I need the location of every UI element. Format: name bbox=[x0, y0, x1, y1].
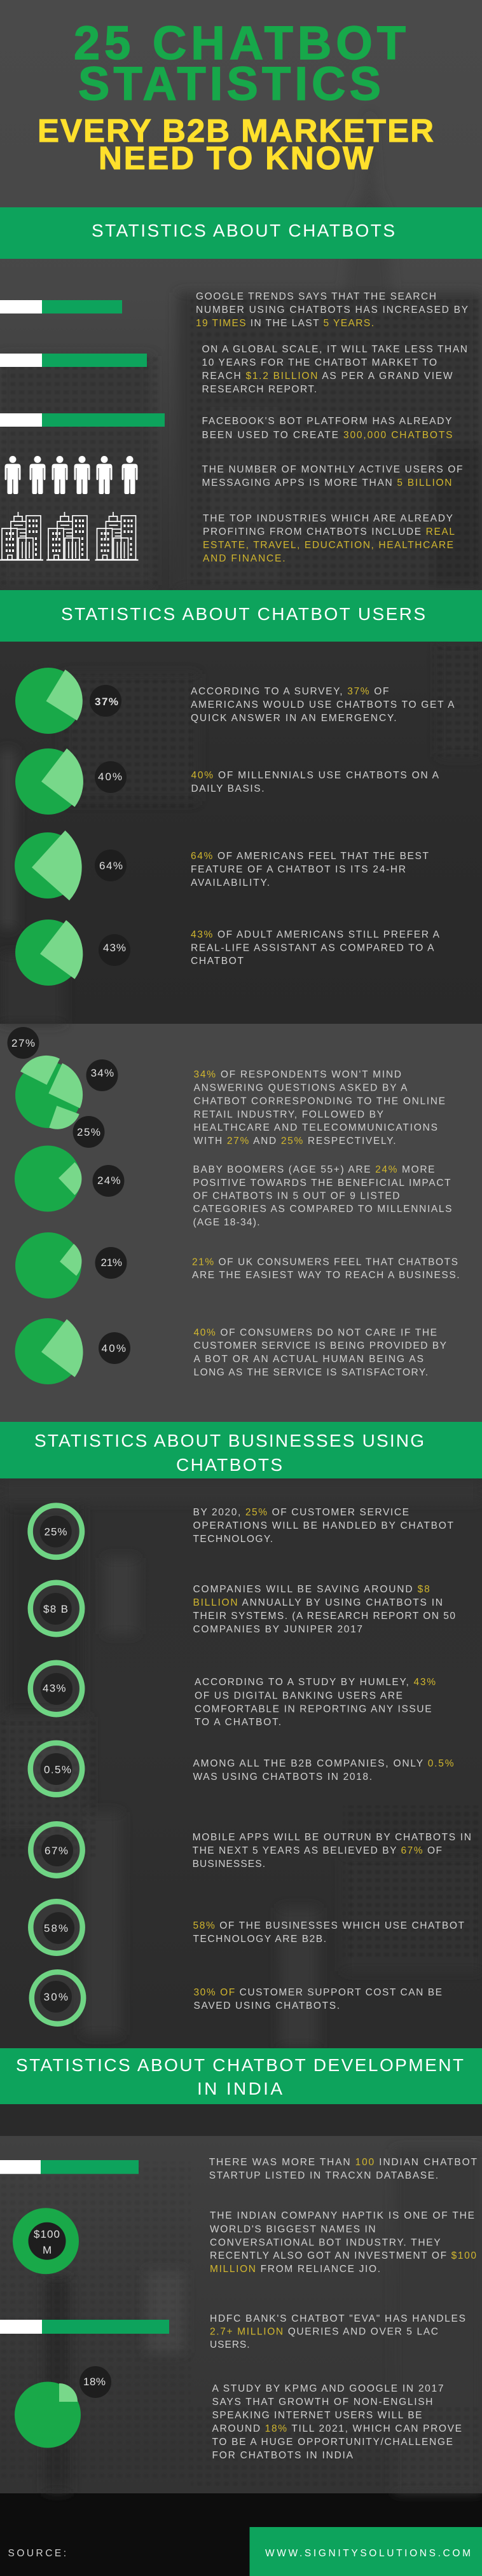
text: 21% uk consumers: ARE THE EASIEST WAY TO REACH A BUSINESS. bbox=[192, 1270, 460, 1281]
text: 21% uk consumers bbox=[192, 1257, 460, 1281]
footer: source label: SOURCE: bbox=[8, 2548, 66, 2559]
text: 100 indian startups: STARTUP LISTED IN TRACXN DATABASE. bbox=[209, 2170, 438, 2181]
pie chart: 24%: 24% bbox=[97, 1174, 121, 1187]
panel: footer background bbox=[0, 2493, 482, 2576]
text: 43% digital banking: COMFORTABLE IN REPORTING ANY ISSUE bbox=[195, 1704, 432, 1714]
pie chart: 37% bbox=[15, 668, 121, 734]
pie chart: 43% bbox=[15, 920, 130, 986]
ring stat: 58% bbox=[31, 1901, 83, 1953]
donut stat: $100 M: M bbox=[43, 2244, 52, 2256]
heading: statistics about businesses using chatbots bbox=[0, 1422, 482, 1478]
text: baby boomers: (AGE 18-34). bbox=[193, 1217, 259, 1228]
text: 58% businesses bbox=[193, 1920, 465, 1945]
panel: chatbot users background bbox=[0, 642, 482, 1024]
text: 64% americans bbox=[191, 851, 429, 888]
text: kpmg google study: AROUND 18% TILL 2021, WHICH CAN PROVE bbox=[212, 2423, 462, 2434]
ring stat: 58%: 58% bbox=[44, 1922, 68, 1934]
text: kpmg google study: FOR CHATBOTS IN INDIA bbox=[212, 2450, 354, 2461]
text: kpmg google study bbox=[212, 2383, 462, 2461]
text: 43% adult americans: CHATBOT bbox=[191, 956, 244, 967]
text: 37% americans: QUICK ANSWER IN AN EMERGENCY. bbox=[191, 713, 397, 724]
text: global scale: REACH $1.2 BILLION AS PER A GRAND VIEW bbox=[202, 371, 453, 382]
text: baby boomers: OF CHATBOTS IN 5 OUT OF 9 LISTED bbox=[193, 1190, 399, 1202]
text: baby boomers: CATEGORIES AS COMPARED TO MILLENNIALS bbox=[193, 1204, 451, 1215]
ring stat: 67%: 67% bbox=[45, 1845, 68, 1857]
text: kpmg google study: SPEAKING INTERNET USERS WILL BE bbox=[212, 2410, 422, 2421]
heading: statistics about chatbot users bbox=[0, 590, 482, 642]
heading: statistics about chatbot development in india: IN INDIA bbox=[197, 2079, 282, 2098]
text: top industries: ESTATE, TRAVEL, EDUCATION, HEALTHCARE bbox=[203, 540, 453, 551]
text: 40% millennials: 40% OF MILLENNIALS USE CHATBOTS ON A bbox=[191, 770, 439, 781]
text: kpmg google study: SAYS THAT GROWTH OF NON-ENGLISH bbox=[212, 2397, 432, 2407]
text: 43% adult americans: REAL-LIFE ASSISTANT AS COMPARED TO A bbox=[191, 943, 434, 954]
text: 43% adult americans: 43% OF ADULT AMERICANS STILL PREFER A bbox=[191, 930, 440, 940]
text: hdfc eva: HDFC BANK'S CHATBOT "EVA" HAS HANDLES bbox=[210, 2313, 465, 2324]
text: 43% digital banking: OF US DIGITAL BANKING USERS ARE bbox=[195, 1690, 403, 1702]
heading: statistics about businesses using chatbots: CHATBOTS bbox=[176, 1455, 282, 1475]
text: 67% mobile apps bbox=[193, 1832, 471, 1870]
footer: website link bbox=[249, 2527, 482, 2576]
text: 64% americans: 64% OF AMERICANS FEEL THAT THE BEST bbox=[191, 851, 429, 862]
ring stat: 25% bbox=[31, 1506, 82, 1557]
text: 37% americans bbox=[191, 686, 455, 724]
text: haptik: RECENTLY ALSO GOT AN INVESTMENT OF $100 bbox=[210, 2250, 476, 2261]
text: 58% businesses: TECHNOLOGY ARE B2B. bbox=[193, 1934, 326, 1945]
bar: 300,000 chatbots bbox=[0, 413, 165, 427]
text: messaging apps: THE NUMBER OF MONTHLY ACTIVE USERS OF bbox=[202, 464, 463, 475]
ring stat: 0.5% bbox=[31, 1743, 82, 1794]
pie chart: 34%, 27%, 25%: 34% bbox=[91, 1067, 114, 1079]
pie chart: 18%: 18% bbox=[83, 2376, 106, 2388]
text: 40% millennials: DAILY BASIS. bbox=[191, 783, 265, 794]
icon row: city buildings bbox=[0, 512, 139, 561]
text: haptik: WORLD'S BIGGEST NAMES IN bbox=[210, 2224, 376, 2235]
ring stat: 25%: 25% bbox=[45, 1526, 67, 1538]
text: google trends bbox=[196, 291, 468, 329]
heading: statistics about chatbots bbox=[0, 207, 482, 259]
text: 43% digital banking: TO A CHATBOT. bbox=[195, 1717, 281, 1728]
text: hdfc eva: USERS. bbox=[210, 2339, 249, 2350]
bar: 19 times bbox=[0, 300, 122, 313]
pie chart: 64% bbox=[15, 830, 127, 900]
text: 34% respondents bbox=[193, 1070, 445, 1147]
pie chart: 34%, 27%, 25%: 27% bbox=[11, 1037, 35, 1049]
text: 100 indian startups bbox=[209, 2157, 478, 2181]
text: hdfc eva: 2.7+ MILLION QUERIES AND OVER 5 LAC bbox=[210, 2326, 438, 2338]
pie chart: 40% bbox=[15, 748, 127, 815]
bar: $1.2 billion bbox=[0, 354, 147, 367]
text: $8 billion savings: THEIR SYSTEMS. (A RESEARCH REPORT ON 50 bbox=[193, 1611, 455, 1622]
icon row: six people bbox=[5, 456, 137, 494]
text: $8 billion savings: BILLION ANNUALLY BY USING CHATBOTS IN bbox=[193, 1597, 443, 1608]
heading: statistics about chatbot development in india bbox=[0, 2048, 482, 2104]
ring stat: 30% bbox=[32, 1972, 83, 2024]
footer: website link: WWW.SIGNITYSOLUTIONS.COM bbox=[265, 2548, 471, 2559]
text: 30% support cost: SAVED USING CHATBOTS. bbox=[193, 2001, 340, 2011]
pie chart: 40% consumers: 40% bbox=[102, 1342, 126, 1354]
text: top industries bbox=[203, 513, 455, 564]
text: google trends: GOOGLE TRENDS SAYS THAT THE SEARCH bbox=[196, 291, 436, 302]
text: 21% uk consumers: 21% OF UK CONSUMERS FEEL THAT CHATBOTS bbox=[192, 1257, 458, 1268]
text: haptik: CONVERSATIONAL BOT INDUSTRY. THEY bbox=[210, 2238, 441, 2249]
text: 0.5% b2b companies: WAS USING CHATBOTS IN 2018. bbox=[193, 1772, 372, 1782]
text: 34% respondents: ANSWERING QUESTIONS ASKED BY A bbox=[193, 1083, 408, 1094]
text: top industries: THE TOP INDUSTRIES WHICH ARE ALREADY bbox=[203, 513, 453, 524]
text: 40% millennials bbox=[191, 770, 439, 794]
title: 25 chatbot statistics bbox=[74, 17, 406, 110]
text: haptik: THE INDIAN COMPANY HAPTIK IS ONE OF THE bbox=[210, 2210, 474, 2221]
ring stat: 67% bbox=[31, 1824, 83, 1876]
text: global scale: RESEARCH REPORT. bbox=[202, 384, 317, 395]
ring stat: $8 B bbox=[31, 1583, 82, 1634]
text: $8 billion savings: COMPANIES BY JUNIPER 2017 bbox=[193, 1624, 362, 1635]
text: 37% americans: AMERICANS WOULD USE CHATBOTS TO GET A bbox=[191, 699, 455, 710]
title: 25 chatbot statistics: 25 CHATBOT bbox=[74, 17, 406, 69]
text: 0.5% b2b companies bbox=[193, 1758, 454, 1782]
text: $8 billion savings: COMPANIES WILL BE SAVING AROUND $8 bbox=[193, 1584, 430, 1595]
ring stat: 30%: 30% bbox=[44, 1991, 68, 2003]
text: messaging apps: MESSAGING APPS IS MORE THAN 5 BILLION bbox=[202, 478, 451, 488]
text: baby boomers: POSITIVE TOWARDS THE BENEFICIAL IMPACT bbox=[193, 1178, 451, 1188]
text: global scale: 10 YEARS FOR THE CHATBOT MARKET TO bbox=[202, 357, 437, 368]
text: 40% consumers: 40% OF CONSUMERS DO NOT CARE IF THE bbox=[193, 1328, 437, 1339]
text: 25% customer service: TECHNOLOGY. bbox=[193, 1534, 273, 1545]
text: kpmg google study: A STUDY BY KPMG AND GOOGLE IN 2017 bbox=[212, 2383, 444, 2394]
ring stat: 0.5%: 0.5% bbox=[44, 1764, 71, 1775]
donut stat: $100 M: $100 bbox=[34, 2228, 60, 2240]
heading: statistics about chatbot development in india: STATISTICS ABOUT CHATBOT DEVELOPMENT bbox=[16, 2055, 464, 2075]
text: 64% americans: AVAILABILITY. bbox=[191, 878, 270, 888]
subtitle: every b2b marketer need to know bbox=[38, 113, 434, 176]
text: facebook bot platform bbox=[202, 416, 453, 441]
pie chart: 34%, 27%, 25% bbox=[8, 1027, 118, 1148]
pie chart: 34%, 27%, 25%: 25% bbox=[77, 1126, 100, 1138]
text: haptik: MILLION FROM RELIANCE JIO. bbox=[210, 2264, 380, 2275]
subtitle: every b2b marketer need to know: EVERY B2B MARKETER bbox=[38, 113, 434, 149]
heading: statistics about chatbots: STATISTICS ABOUT CHATBOTS bbox=[92, 221, 395, 240]
text: 37% americans: ACCORDING TO A SURVEY, 37% OF bbox=[191, 686, 389, 697]
text: 64% americans: FEATURE OF A CHATBOT IS ITS 24-HR bbox=[191, 864, 406, 875]
text: 30% support cost bbox=[193, 1987, 442, 2011]
text: 40% consumers: CUSTOMER SERVICE IS BEING PROVIDED BY bbox=[193, 1340, 446, 1351]
pie chart: 40% consumers bbox=[15, 1318, 130, 1384]
bar: 100 startups bbox=[0, 2160, 139, 2174]
text: 43% digital banking: ACCORDING TO A STUDY BY HUMLEY, 43% bbox=[195, 1677, 436, 1688]
text: 43% digital banking bbox=[195, 1677, 436, 1728]
text: $8 billion savings bbox=[193, 1584, 455, 1635]
text: 34% respondents: RETAIL INDUSTRY, FOLLOWED BY bbox=[193, 1109, 383, 1120]
ring stat: $8 B: $8 B bbox=[43, 1603, 68, 1615]
text: 25% customer service bbox=[193, 1507, 454, 1545]
panel: india development background bbox=[0, 2136, 482, 2493]
text: facebook bot platform: BEEN USED TO CREATE 300,000 CHATBOTS bbox=[202, 430, 453, 441]
heading: statistics about businesses using chatbots: STATISTICS ABOUT BUSINESSES USING bbox=[34, 1431, 424, 1450]
panel: consumer statistics background bbox=[0, 1024, 482, 1422]
heading: statistics about chatbot users: STATISTICS ABOUT CHATBOT USERS bbox=[61, 604, 425, 624]
ring stat: 43% bbox=[31, 1663, 82, 1714]
text: 30% support cost: 30% OF CUSTOMER SUPPORT COST CAN BE bbox=[193, 1987, 442, 1998]
text: top industries: AND FINANCE. bbox=[203, 553, 285, 564]
pie chart: 64%: 64% bbox=[99, 860, 123, 872]
text: 100 indian startups: THERE WAS MORE THAN 100 INDIAN CHATBOT bbox=[209, 2157, 478, 2168]
pie chart: 37%: 37% bbox=[95, 696, 118, 708]
pie chart: 21% bbox=[15, 1232, 127, 1298]
pie chart: 24% bbox=[15, 1146, 125, 1212]
text: 67% mobile apps: BUSINESSES. bbox=[193, 1859, 265, 1870]
pie chart: 18% bbox=[15, 2366, 111, 2448]
text: 40% consumers bbox=[193, 1328, 446, 1378]
text: top industries: PROFITING FROM CHATBOTS INCLUDE REAL bbox=[203, 527, 455, 537]
text: facebook bot platform: FACEBOOK'S BOT PLATFORM HAS ALREADY bbox=[202, 416, 451, 427]
text: google trends: NUMBER USING CHATBOTS HAS INCREASED BY bbox=[196, 305, 468, 315]
panel: statistics about chatbots background bbox=[0, 0, 482, 591]
text: 67% mobile apps: MOBILE APPS WILL BE OUTRUN BY CHATBOTS IN bbox=[193, 1832, 471, 1843]
text: 25% customer service: BY 2020, 25% OF CUSTOMER SERVICE bbox=[193, 1507, 409, 1518]
text: 25% customer service: OPERATIONS WILL BE HANDLED BY CHATBOT bbox=[193, 1520, 454, 1531]
text: 67% mobile apps: THE NEXT 5 YEARS AS BELIEVED BY 67% OF bbox=[193, 1845, 442, 1856]
text: global scale: ON A GLOBAL SCALE, IT WILL TAKE LESS THAN bbox=[202, 344, 467, 355]
pie chart: 40%: 40% bbox=[98, 771, 122, 783]
pie chart: 43%: 43% bbox=[103, 942, 126, 954]
donut stat: $100 M bbox=[13, 2208, 79, 2274]
text: messaging apps bbox=[202, 464, 463, 488]
text: 34% respondents: CHATBOT CORRESPONDING TO THE ONLINE bbox=[193, 1096, 445, 1107]
text: baby boomers: BABY BOOMERS (AGE 55+) ARE 24% MORE bbox=[193, 1164, 435, 1175]
text: haptik bbox=[210, 2210, 476, 2275]
text: 40% consumers: LONG AS THE SERVICE IS SATISFACTORY. bbox=[193, 1367, 428, 1378]
panel: businesses background bbox=[0, 1478, 482, 2136]
pie chart: 21%: 21% bbox=[100, 1257, 122, 1269]
text: 43% adult americans bbox=[191, 930, 440, 967]
text: 34% respondents: 34% OF RESPONDENTS WON'T MIND bbox=[193, 1070, 401, 1080]
text: baby boomers bbox=[193, 1164, 451, 1228]
text: google trends: 19 TIMES IN THE LAST 5 YEARS. bbox=[196, 318, 374, 329]
text: hdfc eva bbox=[210, 2313, 465, 2350]
text: 58% businesses: 58% OF THE BUSINESSES WHICH USE CHATBOT bbox=[193, 1920, 465, 1931]
ring stat: 43%: 43% bbox=[43, 1683, 66, 1694]
bar: 2.7+ million bbox=[0, 2320, 169, 2334]
title: 25 chatbot statistics: STATISTICS bbox=[78, 57, 381, 110]
subtitle: every b2b marketer need to know: NEED TO KNOW bbox=[99, 140, 374, 176]
text: 0.5% b2b companies: AMONG ALL THE B2B COMPANIES, ONLY 0.5% bbox=[193, 1758, 454, 1769]
text: global scale bbox=[202, 344, 467, 395]
text: 34% respondents: HEALTHCARE AND TELECOMMUNICATIONS bbox=[193, 1122, 437, 1133]
text: 34% respondents: WITH 27% AND 25% RESPECTIVELY. bbox=[193, 1136, 396, 1147]
text: 40% consumers: A BOT OR AN ACTUAL HUMAN BEING AS bbox=[193, 1354, 423, 1365]
text: kpmg google study: TO BE A HUGE OPPORTUNITY/CHALLENGE bbox=[212, 2437, 453, 2448]
